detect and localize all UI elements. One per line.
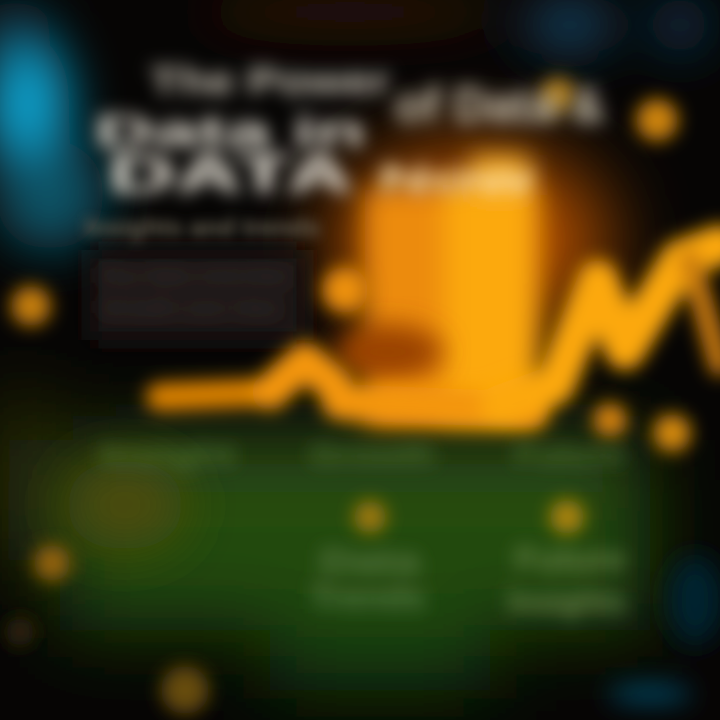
column text: centre: Trends xyxy=(310,579,425,615)
bright line chart xyxy=(160,245,720,410)
olive warm patch xyxy=(65,460,185,550)
title xyxy=(95,61,605,204)
subtitle: Insights and trends xyxy=(85,212,320,242)
orange central block xyxy=(365,155,540,425)
title: DATA xyxy=(108,144,353,204)
column text: centre: Data xyxy=(320,543,420,579)
body text block xyxy=(100,263,291,320)
background glow: blue top left xyxy=(0,0,710,250)
title: Data in xyxy=(95,107,365,156)
column headings: Growth xyxy=(310,439,435,470)
body text block: Growth over time xyxy=(100,295,280,320)
blue glow bottom right xyxy=(608,555,720,703)
dark amber hollow in central block xyxy=(333,324,443,380)
column text: right xyxy=(508,541,626,619)
column headings: Insight xyxy=(100,439,235,470)
dark panel: left text area xyxy=(90,250,305,340)
column text: right: Future xyxy=(515,541,625,577)
title: of Data & xyxy=(395,77,605,133)
title: The Power xyxy=(150,61,390,103)
column text: centre xyxy=(310,543,425,615)
title: Now xyxy=(378,159,534,201)
background glow: amber behind chart xyxy=(330,145,610,335)
column text: right: Insights xyxy=(508,583,626,619)
body text block: Key data overview xyxy=(100,263,291,288)
background glow: green lower field xyxy=(0,400,650,690)
column headings xyxy=(100,439,625,470)
column headings: Future xyxy=(515,439,625,470)
